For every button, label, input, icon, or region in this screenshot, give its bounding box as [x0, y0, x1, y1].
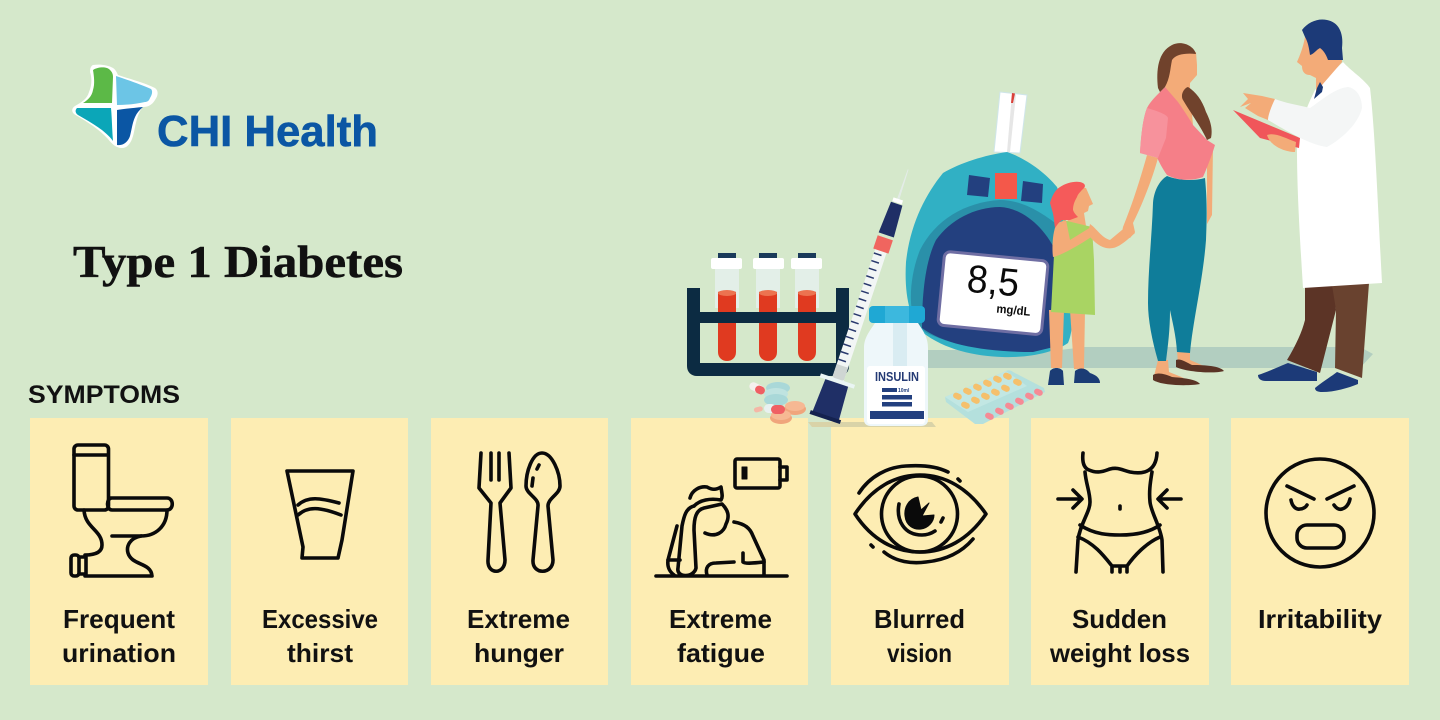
icon: glass of water	[287, 471, 353, 558]
meter navy face	[922, 207, 1062, 352]
label: Excessive	[262, 604, 378, 634]
illustration: test tube rack	[687, 253, 849, 376]
shadow under vial	[808, 422, 936, 427]
title: Type 1 Diabetes	[73, 237, 403, 287]
card: blurred vision	[831, 418, 1009, 685]
card: irritability	[1231, 418, 1409, 685]
logo: CHI Health	[72, 65, 378, 156]
meter inner shade	[911, 200, 1064, 350]
label: Sudden	[1072, 604, 1167, 634]
icon: slim waist with arrows	[1058, 453, 1181, 572]
illustration: loose pills	[748, 381, 806, 424]
rack frame	[687, 288, 849, 376]
label: Extreme	[669, 604, 772, 634]
logo wordmark: CHI Health	[157, 107, 378, 156]
illustration: doctor	[1233, 19, 1382, 392]
label: Irritability	[1258, 604, 1383, 634]
heading: symptoms: SYMPTOMS	[28, 381, 180, 409]
illustration: insulin vial: 10ml	[898, 388, 910, 394]
vial label text: INSULIN	[875, 369, 919, 384]
illustration: child	[1048, 182, 1135, 385]
card: excessive thirst	[231, 418, 408, 685]
card: frequent urination	[30, 418, 208, 685]
icon: eye	[855, 466, 986, 563]
illustration: blister pack	[945, 370, 1045, 424]
card: sudden weight loss	[1031, 418, 1209, 685]
label: Extreme	[467, 604, 570, 634]
symptom cards	[30, 418, 1409, 685]
meter buttons	[967, 173, 1043, 203]
icon: cross star	[72, 65, 158, 148]
illustration: syringe	[808, 164, 925, 425]
card: extreme hunger	[431, 418, 608, 685]
label: Frequent	[63, 604, 175, 634]
illustration: insulin vial	[864, 306, 928, 426]
label: weight loss	[1049, 638, 1190, 668]
illustration: mother	[1122, 43, 1224, 385]
label: thirst	[287, 638, 353, 668]
meter body	[906, 152, 1073, 357]
icon: fork and spoon	[479, 453, 560, 571]
card: extreme fatigue	[631, 418, 808, 685]
label: Blurred	[874, 604, 965, 634]
floor shadow	[928, 347, 1373, 368]
test tubes	[711, 253, 822, 361]
icon: tired person with low battery	[656, 459, 787, 576]
illustration: medical scene	[687, 19, 1382, 427]
reading: 8,5	[965, 258, 1021, 305]
label: fatigue	[677, 638, 765, 668]
label: vision	[887, 638, 952, 668]
unit: mg/dL	[996, 302, 1031, 319]
label: urination	[62, 638, 176, 668]
illustration: glucose meter	[906, 92, 1073, 357]
label: hunger	[474, 638, 564, 668]
meter screen	[938, 251, 1048, 335]
icon: toilet	[71, 445, 172, 576]
icon: angry face	[1266, 459, 1374, 567]
test strip	[994, 92, 1027, 153]
